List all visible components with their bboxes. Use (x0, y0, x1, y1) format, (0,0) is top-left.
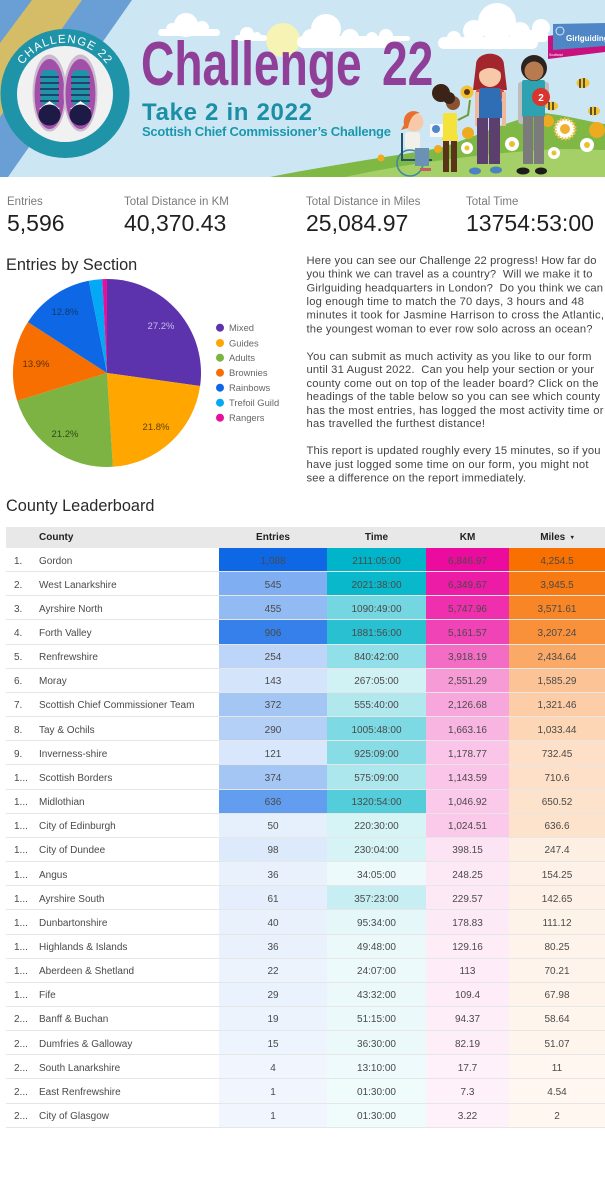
legend: Trefoil Guild (229, 397, 279, 408)
row 3: 455 (265, 604, 281, 615)
row 22: 13:10:00 (357, 1063, 396, 1074)
intro text: log enough time to match the 70 days, 3 hours and 48 (306, 296, 584, 308)
badge: Challenge 22 shoes (0, 29, 130, 158)
legend: Guides (229, 337, 259, 348)
row 6: 1,585.29 (538, 676, 576, 687)
row 1: 6,846.97 (448, 556, 487, 566)
row 7: 555:40:00 (354, 700, 399, 711)
pie percentages: 13.9% (23, 359, 50, 370)
bees (546, 78, 600, 116)
woman in blue (469, 54, 507, 174)
row 10: Scottish Borders (39, 773, 112, 784)
flowers (378, 115, 605, 162)
row 21 (6, 1031, 605, 1055)
row 13: 98 (267, 845, 279, 856)
row 3: 1090:49:00 (351, 604, 402, 615)
row 23: 2... (14, 1087, 28, 1098)
row 21: 2... (14, 1039, 28, 1050)
row 18: 70.21 (544, 966, 570, 977)
row 2 (6, 572, 605, 596)
stat: entries: Entries (7, 196, 43, 208)
row 12: City of Edinburgh (39, 821, 116, 832)
row 23: 7.3 (461, 1087, 474, 1098)
child in wheelchair (397, 111, 432, 176)
row 21: Dumfries & Galloway (39, 1039, 132, 1050)
intro text: headings of the table below so you can see which county (306, 391, 600, 403)
table header: KM (460, 532, 475, 543)
row 21: 15 (267, 1039, 279, 1050)
row 7: 7. (14, 700, 22, 711)
stat: entries (7, 196, 65, 236)
stat: entries: 5,596 (7, 210, 65, 236)
row 2: 6,349.67 (448, 580, 487, 591)
row 16: 178.83 (452, 918, 483, 929)
row 14: 1... (14, 870, 28, 881)
row 23: 1 (270, 1087, 276, 1098)
row 21: 51.07 (544, 1039, 570, 1050)
legend: Rainbows (229, 382, 270, 393)
row 14: 34:05:00 (357, 870, 396, 881)
row 24: 1 (270, 1111, 276, 1122)
row 1: Gordon (39, 556, 72, 566)
clouds (158, 3, 550, 49)
row 18: Aberdeen & Shetland (39, 966, 134, 977)
pie chart: entries by section (12, 279, 279, 467)
row 18: 24:07:00 (357, 966, 396, 977)
row 12: 636.6 (544, 821, 570, 832)
row 15: Ayrshire South (39, 894, 104, 905)
row 3: 3. (14, 604, 22, 615)
table header: Time (365, 532, 388, 543)
row 17: 49:48:00 (357, 942, 396, 953)
row 14: 154.25 (542, 870, 572, 881)
row 11 (6, 790, 605, 814)
row 7: 1,321.46 (538, 700, 576, 711)
row 10 (6, 765, 605, 790)
Girlguiding logo: Scotland (549, 53, 563, 57)
intro text: Girlguiding headquarters in London? Do you think we can (306, 283, 603, 295)
row 1: 2111:05:00 (352, 556, 401, 566)
girl with sunflower (430, 84, 474, 172)
row 24: 2... (14, 1111, 28, 1122)
intro text: This report is updated roughly every 15 minutes, so if you (306, 445, 600, 457)
row 10: 575:09:00 (354, 773, 399, 784)
row 3: Ayrshire North (39, 604, 103, 615)
row 3: 3,571.61 (538, 604, 576, 615)
row 19: Fife (39, 990, 56, 1001)
row 3: 5,747.96 (448, 604, 487, 615)
row 15: 61 (267, 894, 279, 905)
table header: Miles ▾ (540, 532, 574, 543)
banner subtitle: Take 2 in 2022 (142, 99, 312, 126)
row 4: Forth Valley (39, 628, 92, 639)
stat: total time: 13754:53:00 (466, 210, 594, 236)
row 20: 94.37 (455, 1014, 480, 1025)
row 9: 732.45 (542, 749, 572, 760)
row 19: 1... (14, 990, 28, 1001)
row 2: 3,945.5 (540, 580, 574, 591)
row 17 (6, 934, 605, 959)
table header: County (39, 532, 73, 543)
legend: Adults (229, 352, 255, 363)
row 16: 111.12 (542, 918, 572, 929)
row 4 (6, 620, 605, 645)
row 12: 1... (14, 821, 28, 832)
row 4: 4. (14, 628, 22, 639)
row 7: Scottish Chief Commissioner Team (39, 700, 194, 711)
row 19: 29 (267, 990, 279, 1001)
row 15: 1... (14, 894, 28, 905)
row 8: 1,033.44 (538, 725, 576, 736)
slice: Rangers (102, 279, 107, 373)
row 8: 1005:48:00 (351, 725, 402, 736)
pie percentages: 27.2% (148, 321, 175, 332)
row 19: 43:32:00 (357, 990, 396, 1001)
badge: Challenge 22 shoes: CHALLENGE 22 (18, 34, 112, 64)
row 24: 3.22 (458, 1111, 477, 1122)
row 23: 4.54 (547, 1087, 567, 1098)
legend: Brownies (229, 367, 268, 378)
row 6: Moray (39, 676, 67, 687)
row 7: 2,126.68 (448, 700, 487, 711)
shoe: right (64, 54, 98, 132)
intro text: the youngest woman to ever row solo across an ocean? (306, 323, 592, 335)
slice: Adults (17, 373, 113, 467)
pie percentages (23, 307, 175, 440)
row 11: 650.52 (542, 797, 572, 808)
row 9 (6, 741, 605, 765)
row 1: 1,088 (260, 556, 286, 566)
Girlguiding logo (548, 23, 605, 59)
row 24 (6, 1104, 605, 1128)
row 16: 95:34:00 (357, 918, 396, 929)
intro text: You can submit as much activity as you like to our form (306, 351, 592, 363)
row 11: 636 (265, 797, 281, 808)
row 21: 82.19 (455, 1039, 480, 1050)
slice: Guides (107, 373, 200, 467)
row 20: 58.64 (544, 1014, 570, 1025)
row 19 (6, 983, 605, 1007)
row 17: Highlands & Islands (39, 942, 127, 953)
pie percentages: 12.8% (52, 307, 79, 318)
row 8 (6, 717, 605, 741)
stat: total time: Total Time (466, 196, 518, 208)
row 12: 220:30:00 (354, 821, 399, 832)
row 7: 372 (265, 700, 281, 711)
intro text: see a difference on the report immediately. (306, 473, 526, 485)
row 22: 4 (270, 1063, 276, 1074)
row 5: 840:42:00 (354, 652, 399, 663)
row 20 (6, 1007, 605, 1031)
row 9: 1,178.77 (448, 749, 487, 760)
row 22: 2... (14, 1063, 28, 1074)
row 11: 1320:54:00 (351, 797, 402, 808)
slice: Brownies (13, 322, 107, 401)
row 22: 17.7 (458, 1063, 477, 1074)
row 14: 36 (267, 870, 279, 881)
intro text: has travelled the furthest distance! (306, 418, 485, 430)
intro text: Here you can see our Challenge 22 progress! How far do (306, 255, 596, 267)
stat: total distance in km: 40,370.43 (124, 210, 226, 236)
woman in teal: 2 (538, 93, 544, 104)
shoe: left (32, 54, 66, 132)
row 10: 710.6 (544, 773, 570, 784)
row 17: 36 (267, 942, 279, 953)
row 6 (6, 669, 605, 693)
row 10: 374 (265, 773, 281, 784)
sun (266, 23, 300, 57)
row 4: 3,207.24 (538, 628, 576, 639)
slice: Trefoil Guild (89, 279, 107, 373)
row 16: 40 (267, 918, 279, 929)
row 15: 229.57 (452, 894, 483, 905)
row 22: South Lanarkshire (39, 1063, 120, 1074)
row 6: 6. (14, 676, 22, 687)
row 8: 290 (265, 725, 281, 736)
row 23: 01:30:00 (357, 1087, 396, 1098)
row 2: 2021:38:00 (351, 580, 402, 591)
row 24: 01:30:00 (357, 1111, 396, 1122)
row 20: 51:15:00 (357, 1014, 396, 1025)
row 14: Angus (39, 870, 67, 881)
row 13: 398.15 (452, 845, 483, 856)
row 6: 143 (265, 676, 281, 687)
row 21: 36:30:00 (357, 1039, 396, 1050)
row 13: 247.4 (544, 845, 570, 856)
legend: Rangers (229, 412, 265, 423)
heading: entries by section: Entries by Section (6, 256, 137, 274)
row 9: 121 (265, 749, 281, 760)
row 9: 925:09:00 (354, 749, 399, 760)
row 2: 545 (265, 580, 281, 591)
row 14: 248.25 (452, 870, 483, 881)
row 11: 1,046.92 (448, 797, 487, 808)
intro text: until 31 August 2022. Can you help your section or your (306, 364, 594, 376)
row 7 (6, 693, 605, 717)
row 15: 142.65 (542, 894, 572, 905)
row 6: 267:05:00 (354, 676, 399, 687)
row 16: Dunbartonshire (39, 918, 107, 929)
pie percentages: 21.8% (143, 422, 170, 433)
row 8: 1,663.16 (448, 725, 487, 736)
row 24: City of Glasgow (39, 1111, 109, 1122)
row 2: West Lanarkshire (39, 580, 117, 591)
stat: total distance in miles (306, 196, 420, 236)
row 5: 2,434.64 (538, 652, 576, 663)
row 6: 2,551.29 (448, 676, 487, 687)
row 22 (6, 1055, 605, 1079)
slice: Mixed (107, 279, 201, 386)
table header (6, 527, 605, 548)
stat: total distance in miles: 25,084.97 (306, 210, 408, 236)
row 13: City of Dundee (39, 845, 105, 856)
hill (270, 113, 605, 177)
row 4: 5,161.57 (448, 628, 487, 639)
row 15 (6, 886, 605, 910)
row 16 (6, 910, 605, 934)
row 23: East Renfrewshire (39, 1087, 121, 1098)
county leaderboard table (6, 527, 605, 1128)
row 18: 113 (460, 966, 475, 977)
row 11: 1... (14, 797, 28, 808)
table header: Entries (256, 532, 290, 543)
row 16: 1... (14, 918, 28, 929)
row 20: 19 (267, 1014, 279, 1025)
legend (216, 322, 279, 423)
row 1: 1. (14, 556, 22, 566)
heading: county leaderboard: County Leaderboard (6, 497, 154, 515)
row 12: 1,024.51 (448, 821, 487, 832)
row 24: 2 (554, 1111, 560, 1122)
intro text (306, 255, 604, 485)
row 18: 22 (267, 966, 279, 977)
row 9: 9. (14, 749, 22, 760)
row 10: 1,143.59 (448, 773, 487, 784)
row 2: 2. (14, 580, 22, 591)
row 20: 2... (14, 1014, 28, 1025)
pie percentages: 21.2% (52, 429, 79, 440)
intro text: county come out on top of the leader board? Click on the (306, 378, 598, 390)
row 11: Midlothian (39, 797, 85, 808)
banner (0, 0, 605, 177)
stat: total time (466, 196, 594, 236)
row 22: 11 (552, 1063, 562, 1074)
row 18: 1... (14, 966, 28, 977)
intro text: has the most entries, has logged the most activity time or (306, 405, 604, 417)
intro text: you think we can travel as a country? Will we make it to (306, 269, 592, 281)
row 13: 1... (14, 845, 28, 856)
row 1 (6, 548, 605, 572)
row 8: 8. (14, 725, 22, 736)
row 5: 254 (265, 652, 281, 663)
row 1: 4,254.5 (540, 556, 574, 566)
intro text: have just logged some time on our form, you might not (306, 459, 589, 471)
row 12: 50 (267, 821, 279, 832)
banner strapline: Scottish Chief Commissioner’s Challenge (142, 124, 391, 139)
row 23 (6, 1079, 605, 1104)
row 20: Banff & Buchan (39, 1014, 108, 1025)
row 5: 5. (14, 652, 22, 663)
intro text: minutes it took for Jasmine Harrison to cross the Atlantic, (306, 310, 604, 322)
row 3 (6, 596, 605, 620)
row 5 (6, 645, 605, 669)
row 10: 1... (14, 773, 28, 784)
woman in teal (516, 55, 550, 174)
banner title: Challenge 22 (141, 29, 433, 99)
legend: Mixed (229, 322, 254, 333)
stat: total distance in miles: Total Distance in Miles (306, 196, 420, 208)
row 15: 357:23:00 (354, 894, 399, 905)
row 13: 230:04:00 (354, 845, 399, 856)
row 17: 129.16 (452, 942, 483, 953)
row 14 (6, 862, 605, 886)
row 5: 3,918.19 (448, 652, 487, 663)
row 8: Tay & Ochils (39, 725, 95, 736)
slice: Rainbows (28, 281, 107, 373)
row 12 (6, 814, 605, 838)
row 4: 906 (265, 628, 281, 639)
row 4: 1881:56:00 (351, 628, 402, 639)
row 17: 80.25 (544, 942, 570, 953)
row 9: Inverness-shire (39, 749, 107, 760)
row 19: 67.98 (544, 990, 570, 1001)
row 18 (6, 959, 605, 983)
row 19: 109.4 (455, 990, 480, 1001)
stat: total distance in km: Total Distance in KM (124, 196, 229, 208)
row 5: Renfrewshire (39, 652, 98, 663)
row 13 (6, 838, 605, 862)
stat: total distance in km (124, 196, 229, 236)
row 17: 1... (14, 942, 28, 953)
